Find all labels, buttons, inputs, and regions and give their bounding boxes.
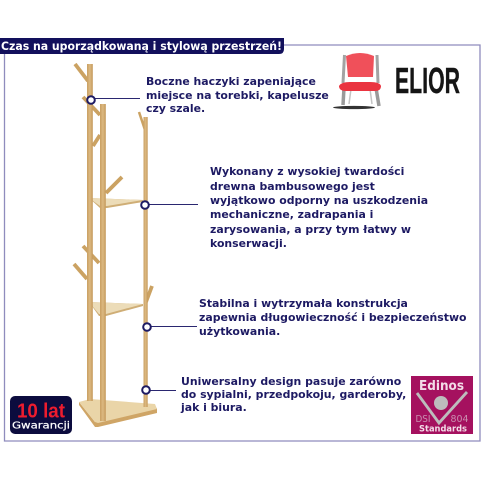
badge: Edinos standards: Standards	[419, 424, 467, 434]
rack branches	[74, 64, 152, 302]
icon: red chair logo	[333, 53, 381, 109]
callout: bamboo material: konserwacji.	[210, 237, 287, 250]
rack posts	[87, 64, 93, 401]
title banner: Czas na uporządkowaną i stylową przestrzeń!	[1, 40, 282, 53]
callout: stability: Stabilna i wytrzymała konstrukcja	[199, 297, 408, 310]
callout: universal design	[142, 375, 406, 414]
badge: Edinos standards: Edinos	[419, 379, 464, 394]
callout: hooks	[87, 75, 329, 115]
callout: stability	[143, 297, 467, 338]
callout: bamboo material: wyjątkowo odporny na uszkodzenia	[210, 194, 428, 207]
icon: coat rack	[74, 64, 157, 427]
callout: stability: użytkowania.	[199, 325, 280, 338]
callout: bamboo material	[141, 165, 428, 250]
callout: stability: zapewnia długowieczność i bezpieczeństwo	[199, 311, 467, 324]
badge: Edinos standards	[411, 376, 473, 434]
badge: 10 year warranty: Gwarancji	[12, 420, 70, 432]
rack base	[79, 399, 157, 427]
callout: bamboo material: mechaniczne, zadrapania i	[210, 208, 373, 221]
callout: hooks: Boczne haczyki zapeniające	[146, 75, 316, 88]
callout: universal design: Uniwersalny design pasuje zarówno	[181, 375, 402, 388]
badge: 10 year warranty	[10, 396, 72, 434]
callout: hooks: czy szale.	[146, 102, 205, 115]
callout: bamboo material: drewna bambusowego jest	[210, 180, 375, 193]
callout: hooks: miejsce na torebki, kapelusze	[146, 89, 329, 102]
badge: Edinos standards: DSI	[416, 414, 430, 425]
callout: bamboo material: Wykonany z wysokiej twardości	[210, 165, 404, 178]
callout: bamboo material: zarysowania, a przy tym łatwy w	[210, 223, 411, 236]
callout: universal design: do sypialni, przedpokoju, garderoby,	[181, 388, 406, 401]
rack shelves	[89, 198, 143, 316]
callout: universal design: jak i biura.	[180, 401, 247, 414]
badge: 10 year warranty: 10 lat	[17, 400, 65, 422]
badge: Edinos standards: 804	[450, 414, 468, 425]
